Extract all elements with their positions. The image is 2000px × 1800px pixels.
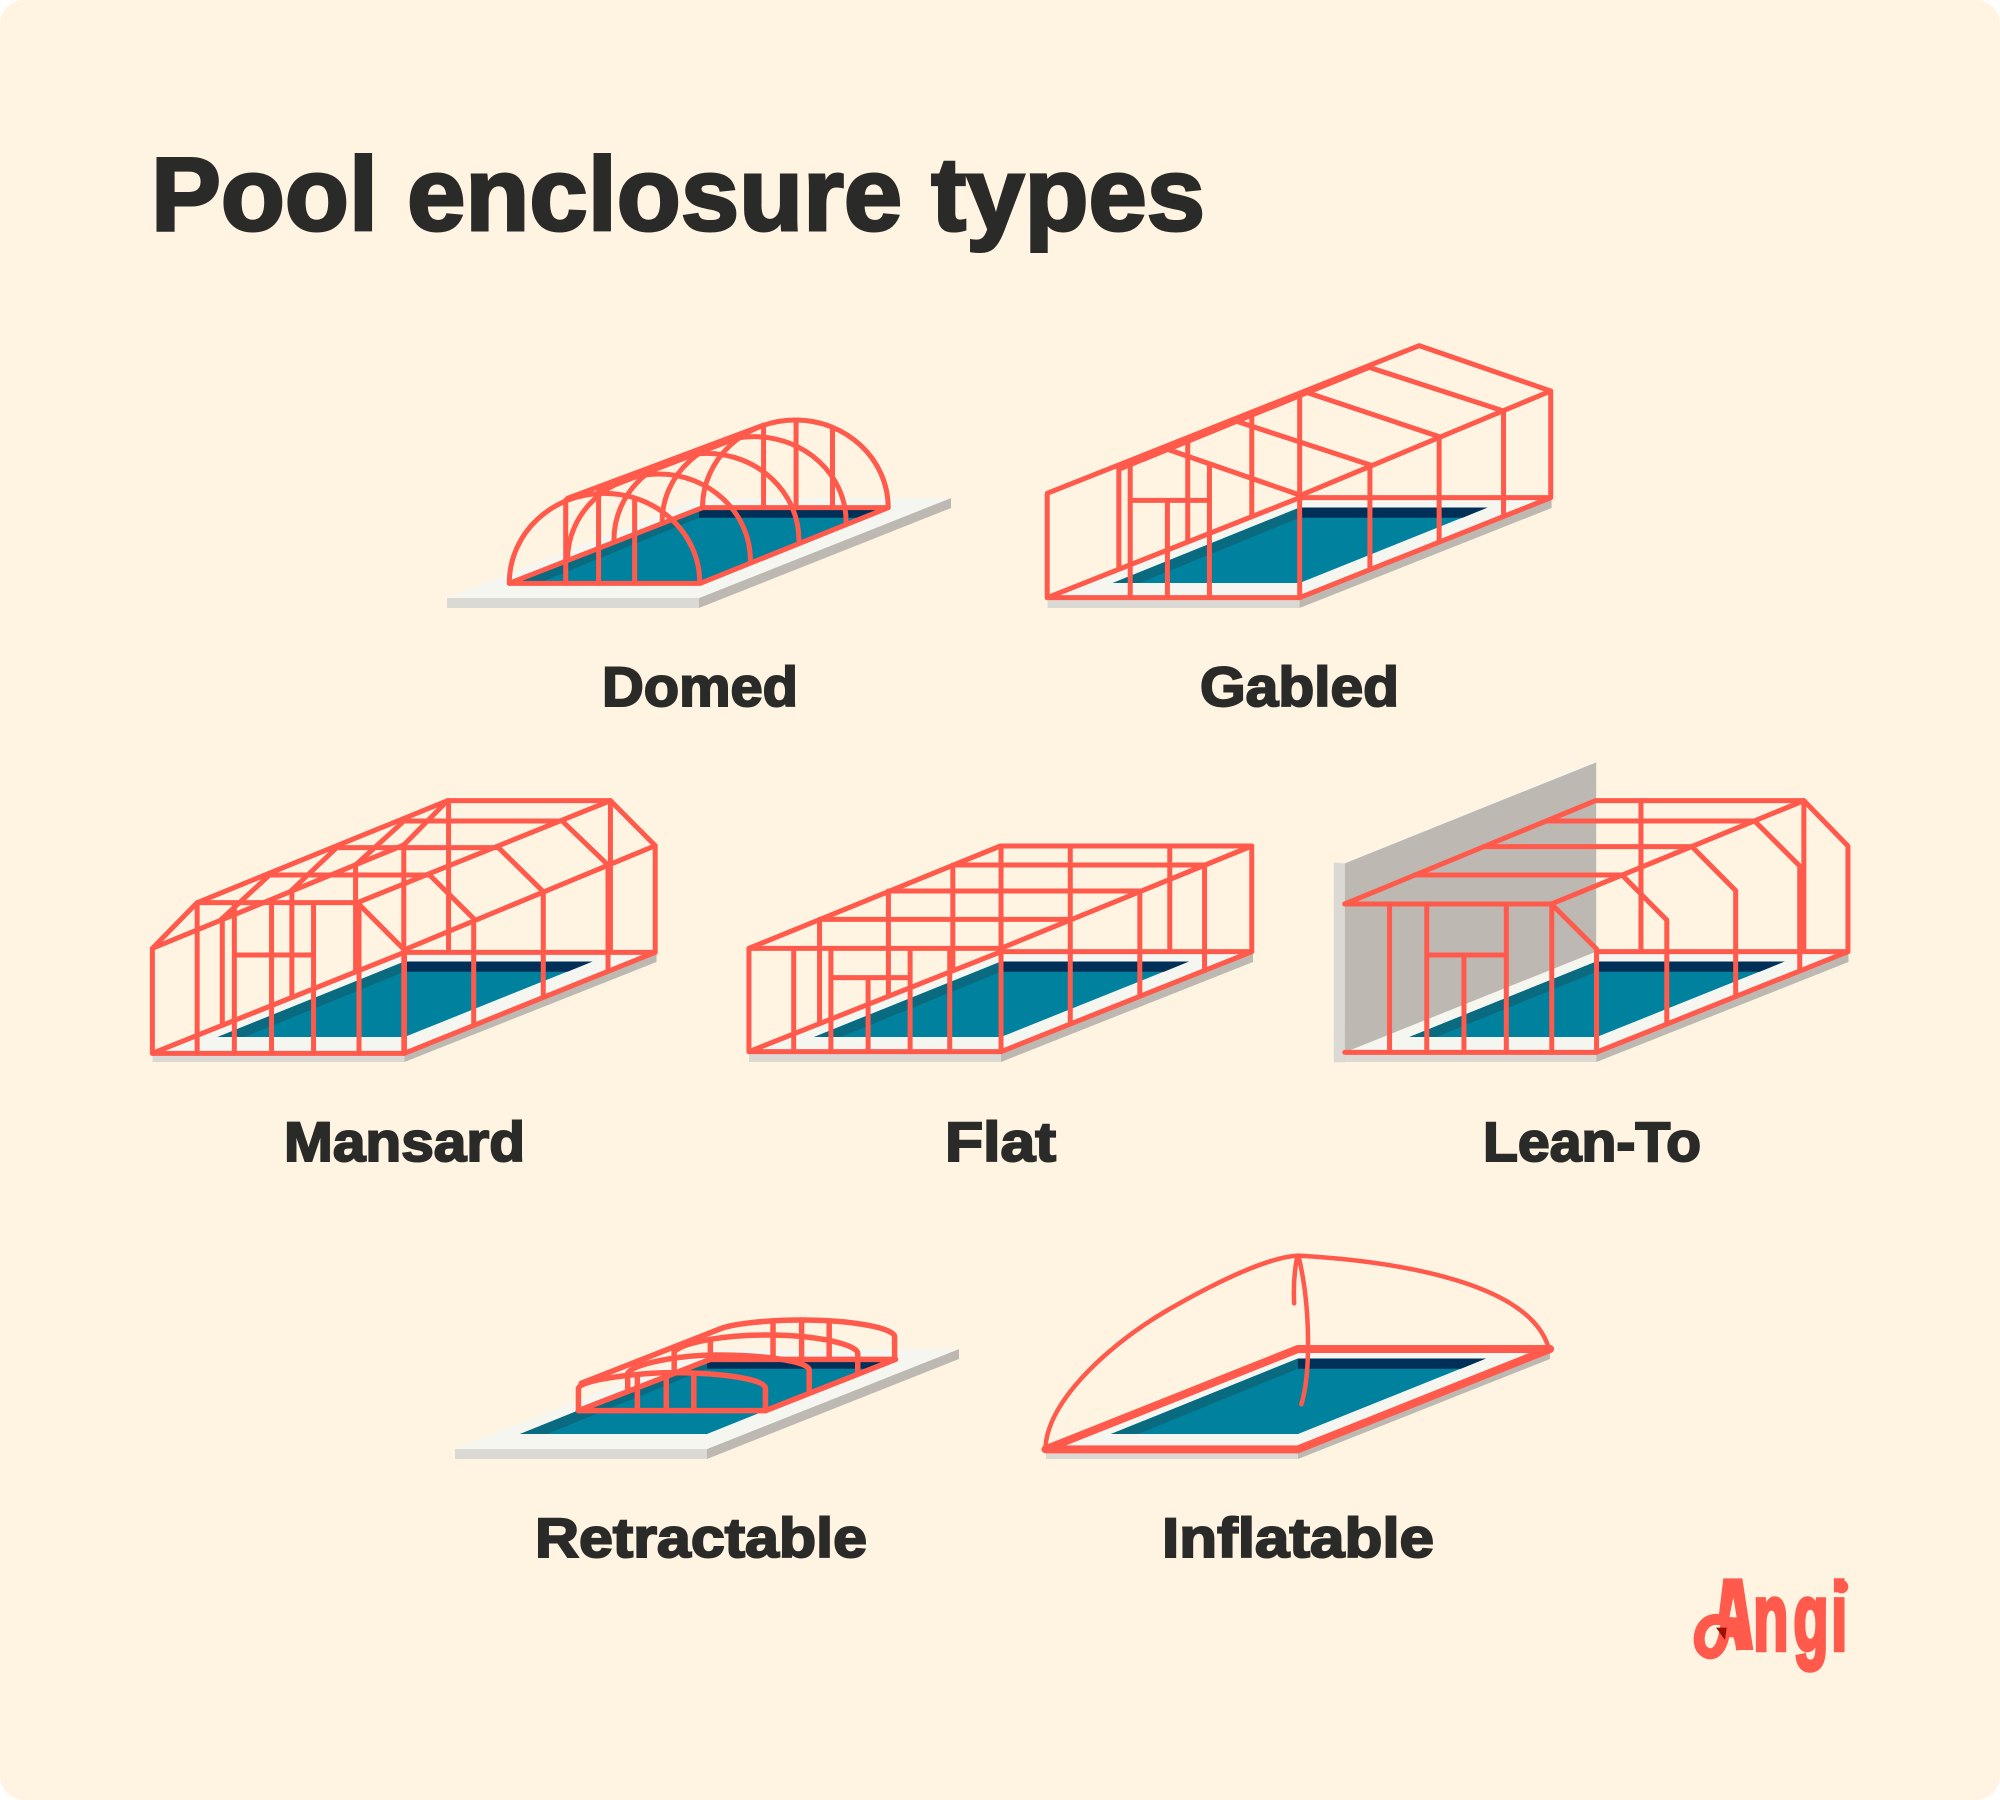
- label: Mansard: Mansard: [284, 1110, 525, 1173]
- illustration: gabled enclosure: [1047, 346, 1552, 608]
- logo: Angi: ngi: [1753, 1563, 1847, 1671]
- frame: mansard: [152, 801, 655, 1053]
- label: Domed: Domed: [602, 655, 798, 718]
- title: Pool enclosure types: [151, 137, 1205, 253]
- illustration: mansard enclosure: [152, 801, 656, 1062]
- illustration: inflatable enclosure: [1045, 1256, 1550, 1459]
- pool: inflatable: [1046, 1349, 1550, 1459]
- pool: domed: [447, 498, 951, 608]
- illustration: flat enclosure: [749, 846, 1253, 1062]
- label: Lean-To: Lean-To: [1483, 1110, 1701, 1173]
- pool: lean-to: [1344, 952, 1848, 1062]
- frame: lean-to: [1345, 801, 1848, 1052]
- pool: gabled: [1048, 498, 1552, 608]
- pool water: lean-to: [1410, 962, 1784, 1037]
- label: Gabled: Gabled: [1200, 655, 1399, 718]
- pool: mansard: [152, 952, 656, 1062]
- frame: flat: [749, 846, 1252, 1052]
- illustration: lean-to enclosure: [1334, 761, 1848, 1062]
- label: Flat: Flat: [945, 1110, 1056, 1173]
- frame: inflatable rim: [1045, 1349, 1550, 1449]
- pool: retractable: [455, 1349, 959, 1459]
- frame: inflatable dome: [1045, 1256, 1548, 1447]
- house wall: [1334, 761, 1596, 1062]
- label: Retractable: Retractable: [535, 1506, 867, 1569]
- pool: flat: [749, 952, 1253, 1062]
- logo: Angi: A: [1727, 1588, 1750, 1647]
- frame: retractable: [578, 1320, 896, 1411]
- illustration: retractable enclosure: [455, 1320, 959, 1459]
- frame: gabled: [1047, 346, 1551, 598]
- frame: domed: [509, 420, 888, 583]
- logo: Angi: [1699, 1563, 1848, 1671]
- illustration: domed enclosure: [447, 420, 951, 608]
- label: Inflatable: Inflatable: [1162, 1506, 1434, 1569]
